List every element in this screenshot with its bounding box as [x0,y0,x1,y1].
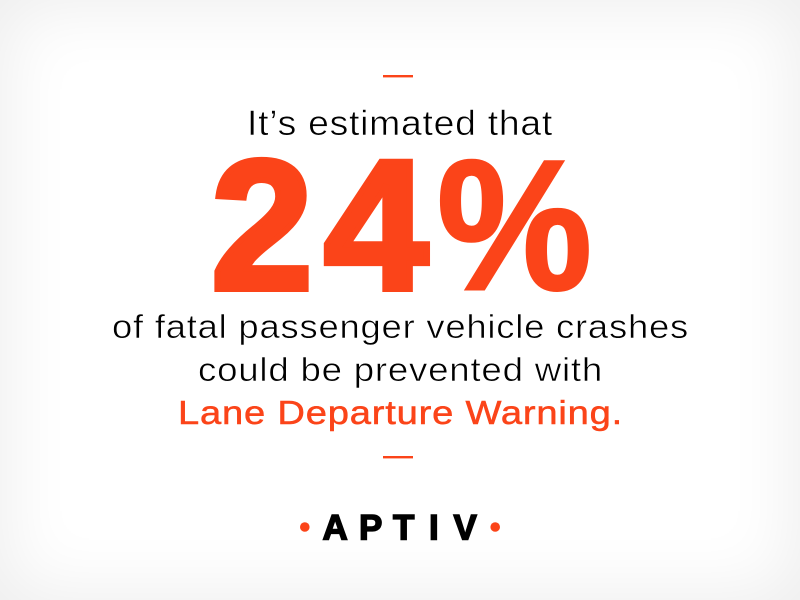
intro text: It’s estimated that [247,104,553,143]
logo right dot [490,522,500,532]
description line 1: of fatal passenger vehicle crashes [112,308,689,345]
big statistic 24%: 4 [324,123,428,329]
description line 2: could be prevented with [198,351,603,388]
logo wordmark: APTIV [322,508,478,547]
big statistic 24% [211,123,592,329]
bottom accent dash [383,456,413,458]
logo left dot [300,522,310,532]
top accent dash [383,75,413,77]
highlighted feature name: Lane Departure Warning. [178,394,623,431]
APTIV logo [300,508,500,547]
big statistic 24%: % [437,123,592,329]
big statistic 24%: 2 [211,123,313,329]
